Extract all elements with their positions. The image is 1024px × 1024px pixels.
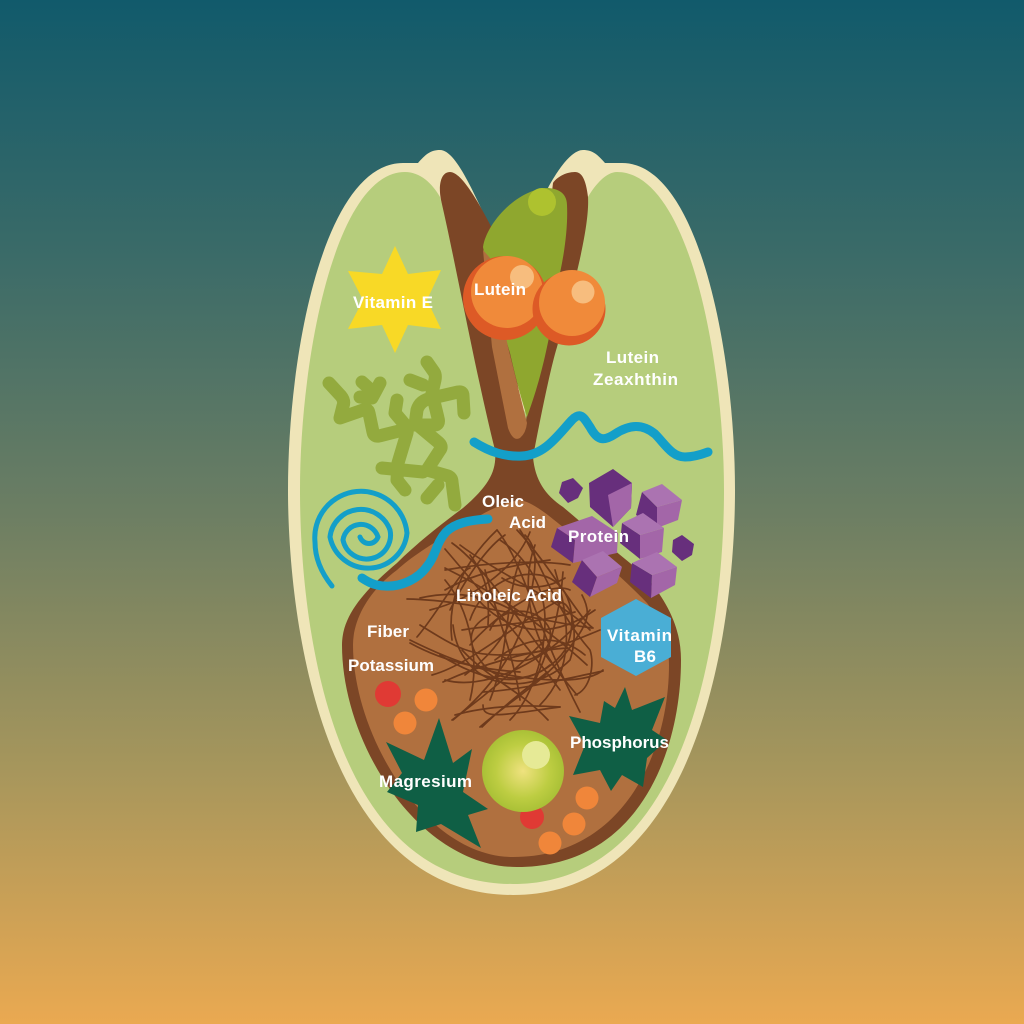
label: Lutein Zeaxhthin xyxy=(593,348,678,389)
icon: Vitamin B6 hexagon xyxy=(601,599,671,676)
leaf highlight xyxy=(528,188,556,216)
label: Lutein on sphere: Lutein xyxy=(474,280,526,299)
cube three xyxy=(620,513,664,559)
label: Protein: Protein xyxy=(568,527,629,546)
icon: Vitamin E star xyxy=(348,246,441,353)
green flesh xyxy=(300,172,724,884)
green nutrient sphere xyxy=(482,730,564,812)
orange sphere one xyxy=(463,256,547,340)
label: Oleic Acid xyxy=(482,492,546,532)
tangled fibre mesh xyxy=(407,530,603,727)
light brown seed interior xyxy=(353,500,669,857)
blue wave upper xyxy=(474,416,708,457)
icon: Phosphorus star xyxy=(569,687,667,791)
label: Vitamin E: Vitamin E xyxy=(353,293,433,312)
label: Vitamin B6: B6 xyxy=(634,647,656,666)
outer cream shell xyxy=(288,150,735,895)
icon: Magnesium star xyxy=(386,718,488,848)
label: Magresium: Magresium xyxy=(379,772,472,791)
cube six xyxy=(630,552,677,598)
small hexagon left xyxy=(559,478,583,503)
nutrient labels xyxy=(348,280,678,791)
blue wave lower xyxy=(362,519,488,586)
mineral dots lower right xyxy=(520,786,598,854)
label: Lutein Zeaxhthin: Lutein xyxy=(606,348,659,367)
label: Oleic Acid: Acid xyxy=(509,513,546,532)
label: Oleic Acid: Oleic xyxy=(482,492,524,511)
green leaf xyxy=(483,188,567,417)
label: Lutein Zeaxhthin: Zeaxhthin xyxy=(593,370,678,389)
blue spiral xyxy=(315,491,407,586)
orange sphere two xyxy=(532,270,606,346)
label: Vitamin B6 xyxy=(607,626,672,666)
seed diagram xyxy=(288,150,735,895)
mineral dots upper left xyxy=(375,681,438,734)
label: Vitamin B6: Vitamin xyxy=(607,626,672,645)
purple protein cubes xyxy=(551,469,694,598)
label: Phosphorus: Phosphorus xyxy=(570,733,669,752)
label: Fiber: Fiber xyxy=(367,622,409,641)
label: Linoleic Acid: Linoleic Acid xyxy=(456,586,562,605)
cube five xyxy=(572,551,622,597)
light brown stem strip xyxy=(483,250,527,439)
label: Potassium: Potassium xyxy=(348,656,434,675)
cube two xyxy=(636,484,682,528)
green amino acid squiggle xyxy=(329,362,464,505)
cube one xyxy=(589,469,632,527)
brown seed coat and stem xyxy=(342,172,681,867)
small hexagon right xyxy=(672,535,694,561)
cube four xyxy=(551,516,618,563)
